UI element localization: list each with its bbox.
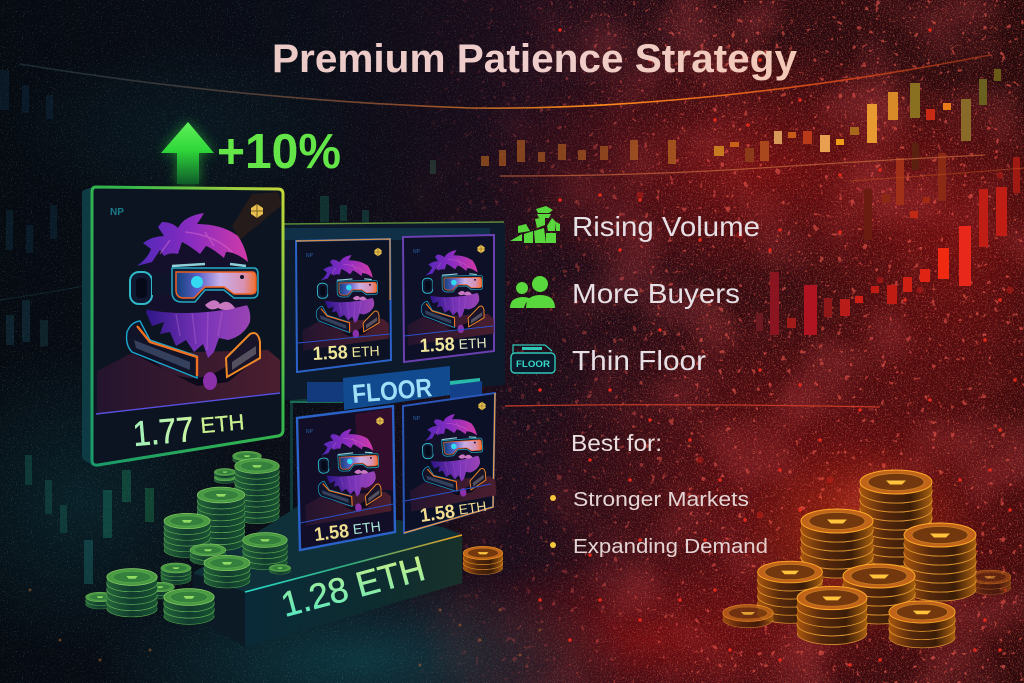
text: Thin Floor: Thin Floor bbox=[572, 345, 706, 376]
text: Stronger Markets: Stronger Markets bbox=[573, 489, 749, 511]
panel: NFT card bottom left 1.58 ETH: ETH bbox=[352, 518, 382, 537]
panel: NFT card bottom right 1.58 ETH: ETH bbox=[458, 498, 487, 518]
panel: NFT card top left 1.58 ETH: 1.58 bbox=[312, 342, 348, 365]
label: NP: NP bbox=[110, 207, 124, 218]
panel: NFT card bottom right 1.58 ETH: NP bbox=[413, 416, 421, 422]
icon: rising volume coins bbox=[510, 206, 560, 243]
text: Expanding Demand: Expanding Demand bbox=[573, 536, 768, 558]
panel: NFT card top right 1.58 ETH: NP bbox=[413, 249, 421, 255]
panel: floor cards back rack bbox=[284, 222, 505, 552]
text: 1.28 ETH: 1.28 ETH bbox=[277, 549, 429, 625]
icon: bullet two bbox=[550, 542, 556, 548]
label: FLOOR banner: FLOOR bbox=[351, 372, 433, 409]
coins: gold stacks bbox=[723, 440, 1011, 648]
panel: 1.28 ETH platform bbox=[193, 505, 462, 647]
panel: NFT card top right 1.58 ETH: ETH bbox=[458, 335, 487, 352]
icon: green up arrow bbox=[161, 122, 214, 184]
panel: NFT card bottom left 1.58 ETH: NP bbox=[306, 429, 314, 435]
icon: floor tag bbox=[511, 345, 555, 373]
panel: NFT card top right 1.58 ETH: 1.58 bbox=[419, 334, 455, 357]
panel: NFT card top left 1.58 ETH: ETH bbox=[351, 343, 380, 360]
character: bearded purple VR figure bbox=[97, 213, 280, 414]
panel: NFT card top left 1.58 ETH: NP bbox=[306, 253, 314, 259]
panel: NFT card top left 1.58 ETH bbox=[296, 239, 391, 372]
text: Best for heading: Best for: bbox=[571, 430, 662, 456]
coins: small orange stack bbox=[463, 546, 503, 574]
panel: NFT card bottom right 1.58 ETH: 1.58 bbox=[419, 501, 456, 527]
price: 1.77 ETH bbox=[131, 405, 246, 454]
price: 1.77 ETH: 1.77 bbox=[131, 410, 195, 454]
icon: floor tag: FLOOR bbox=[516, 359, 551, 369]
icon: bullet one bbox=[550, 495, 556, 501]
chart: bright red rising candlesticks bbox=[756, 157, 1020, 335]
panel: NFT card top right 1.58 ETH bbox=[403, 235, 494, 362]
heading: +10% gain: +10% bbox=[217, 125, 341, 179]
panel: NFT card bottom left 1.58 ETH bbox=[297, 406, 395, 550]
panel: premium NFT card 1.77 ETH bbox=[82, 187, 283, 465]
chart lines: curved trend lines bbox=[0, 55, 1024, 407]
panel: NFT card bottom right 1.58 ETH bbox=[403, 393, 497, 533]
panel: NFT card bottom left 1.58 ETH: 1.58 bbox=[313, 521, 350, 546]
text: Rising Volume: Rising Volume bbox=[572, 211, 760, 242]
title: Premium Patience Strategy bbox=[272, 37, 798, 81]
chart: orange candlesticks bbox=[481, 69, 1001, 166]
icon: more buyers people bbox=[510, 276, 555, 308]
chart: dark red mid candlesticks bbox=[864, 143, 946, 240]
chart: faint left candlesticks bbox=[0, 70, 436, 584]
coins: green stacks bbox=[86, 451, 291, 624]
text: More Buyers: More Buyers bbox=[572, 278, 740, 309]
icon: card emblem bbox=[251, 204, 263, 218]
price: 1.77 ETH: ETH bbox=[199, 409, 245, 438]
